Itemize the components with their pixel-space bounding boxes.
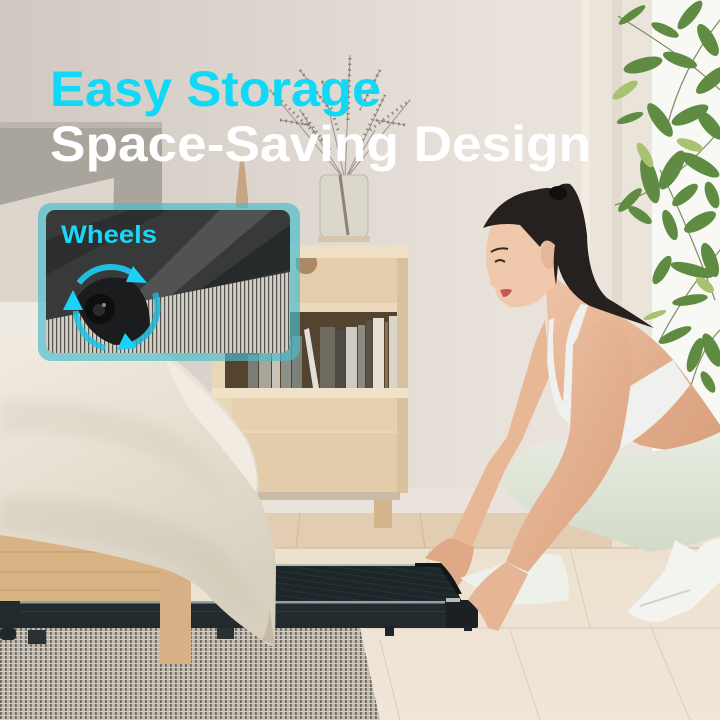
title line 1: Easy Storage <box>50 61 381 117</box>
near shoe <box>628 538 720 622</box>
books <box>248 316 397 388</box>
background: wall and window <box>0 0 720 520</box>
inset frame <box>38 203 300 361</box>
wooden vase <box>236 160 248 208</box>
nightstand with books <box>212 245 408 528</box>
near hand <box>468 562 528 631</box>
neck and torso <box>545 270 720 452</box>
woman <box>425 184 720 631</box>
inset label: Wheels <box>61 221 157 249</box>
far arm <box>452 320 550 547</box>
floor <box>0 513 720 720</box>
inset photo <box>46 210 290 353</box>
treadmill deck <box>270 566 462 602</box>
hair tie <box>549 186 567 200</box>
rotation arrows <box>76 267 158 348</box>
headboard and pillow <box>0 122 162 345</box>
dried flowers in glass vase <box>270 55 410 242</box>
inset panel: wheels close-up <box>38 203 300 361</box>
lips and eye <box>491 248 512 297</box>
pants: thigh and lower leg <box>505 432 720 552</box>
face <box>486 205 565 307</box>
duvet <box>0 338 276 646</box>
rug <box>0 628 380 720</box>
plant <box>610 0 720 395</box>
title <box>50 61 591 172</box>
far shoe <box>460 552 569 605</box>
far hand <box>425 538 474 586</box>
near arm <box>506 318 633 572</box>
hair <box>483 184 654 328</box>
white sports bra <box>547 304 690 448</box>
bed leg <box>160 570 191 664</box>
bed frame <box>0 533 180 601</box>
title line 2: Space-Saving Design <box>50 116 591 172</box>
treadmill body <box>0 601 478 628</box>
ear <box>541 239 557 269</box>
treadmill <box>0 563 478 644</box>
